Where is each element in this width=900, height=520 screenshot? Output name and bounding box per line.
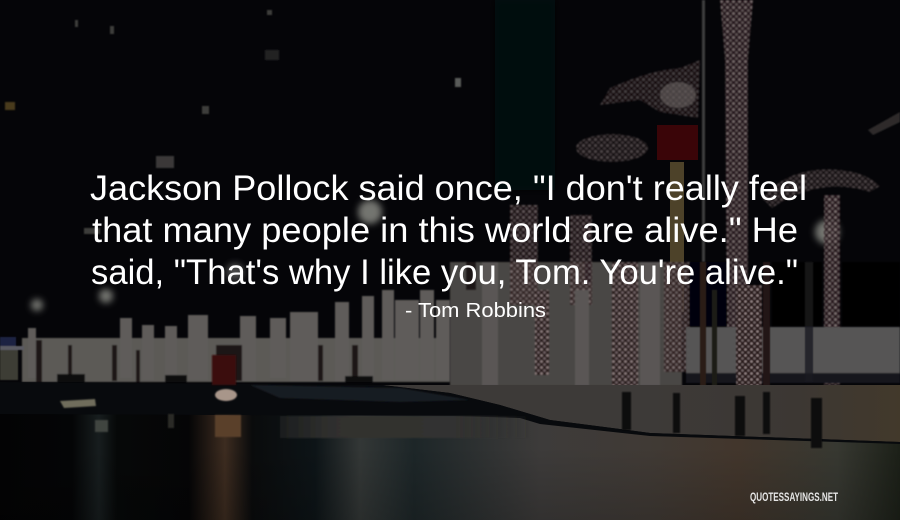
illuminated palm: crown and trunk [576, 0, 900, 385]
street lamp glows [31, 200, 839, 311]
quote line 1: Jackson Pollock said once, "I don't really feel [90, 169, 807, 208]
blue sign far left [0, 337, 24, 380]
promenade bank [382, 385, 900, 442]
blue tower glow [495, 0, 555, 190]
white wall on the right [686, 327, 900, 383]
watermark: QUOTESSAYINGS.NET [750, 490, 838, 504]
dark curved waterfront road [0, 382, 900, 444]
promenade of lit palms left to centre [22, 290, 450, 382]
mooring posts [622, 392, 822, 448]
dark trunks and posts on the right [690, 262, 900, 432]
central lit trunks [450, 205, 690, 387]
red lantern and boat light [60, 355, 237, 408]
quote line 2: that many people in this world are alive." He [92, 211, 798, 250]
red banner on pole [657, 125, 698, 160]
quote line 3: said, "That's why I like you, Tom. You're alive." [91, 253, 798, 292]
quote text [90, 169, 807, 292]
attribution: - Tom Robbins [405, 300, 546, 322]
yellow banner on pole [670, 162, 684, 312]
distant building lights [5, 10, 461, 234]
light reflections on water [95, 414, 530, 438]
water reflection [0, 414, 900, 520]
